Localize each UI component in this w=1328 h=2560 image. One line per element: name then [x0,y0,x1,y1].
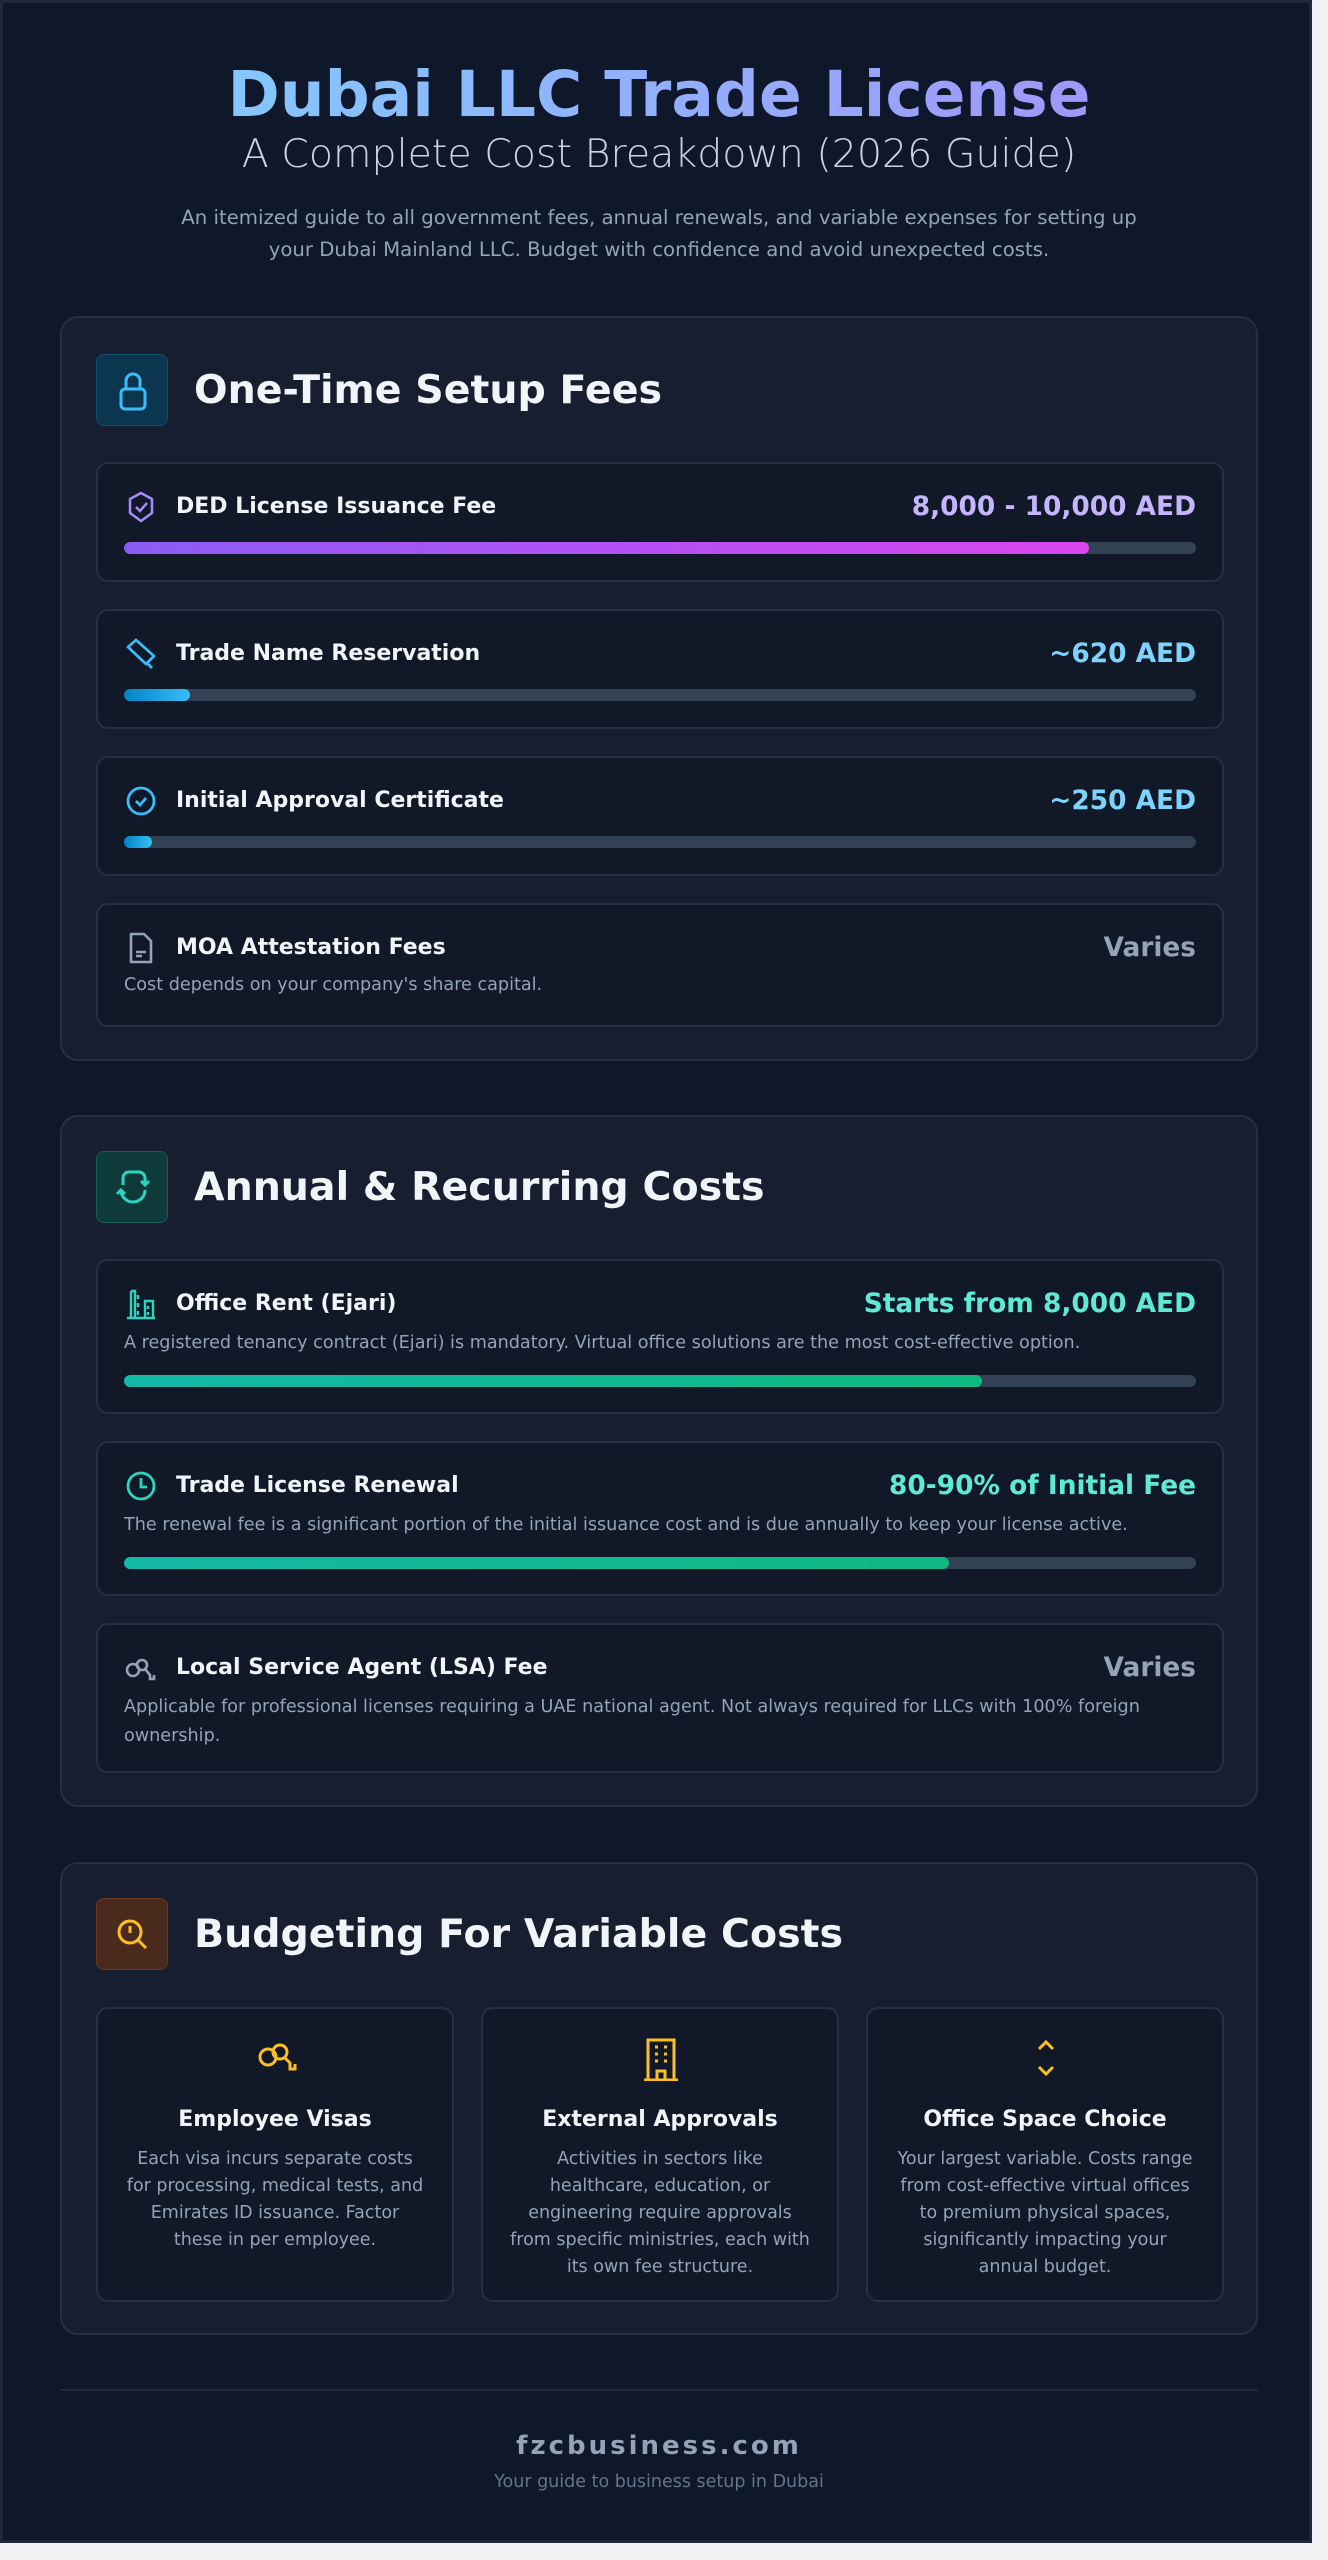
icon: building [644,2038,678,2081]
icon: building [127,1290,155,1320]
value: Starts from 8,000 AED [864,1288,1196,1319]
value: ~250 AED [1049,785,1196,816]
value: 80-90% of Initial Fee [889,1470,1196,1501]
intro text: your Dubai Mainland LLC. Budget with confidence and avoid unexpected costs. [269,238,1049,261]
card: initial approval [96,756,1224,876]
card: office space [866,2007,1224,2302]
footer tagline: Your guide to business setup in Dubai [494,2472,824,2492]
icon: badge check [128,492,154,522]
icon: refresh [96,1151,168,1223]
card: MOA attestation [96,903,1224,1027]
bar [124,836,1196,848]
card: external approvals: External Approvals [542,2107,778,2132]
intro text [181,206,1137,261]
card: DED license [96,462,1224,582]
icon: key [126,1658,156,1680]
icon: chevrons [1038,2040,1054,2076]
icon: document [130,932,152,964]
card: employee visas [96,2007,454,2302]
label: Local Service Agent (LSA) Fee [176,1655,548,1680]
note: Cost depends on your company's share capital. [124,975,542,995]
label: Trade Name Reservation [176,641,480,666]
bar [124,689,1196,701]
heading: Annual & Recurring Costs [194,1164,764,1210]
note: The renewal fee is a significant portion of the initial issuance cost and is due annually to keep your license active. [124,1515,1128,1535]
card: external approvals [481,2007,839,2302]
value: Varies [1104,932,1196,963]
intro text: An itemized guide to all government fees, annual renewals, and variable expenses for setting up [181,206,1137,229]
label: DED License Issuance Fee [176,494,496,519]
value: 8,000 - 10,000 AED [912,491,1196,522]
bar [124,1375,1196,1387]
label: Office Rent (Ejari) [176,1291,396,1316]
card: office space: Office Space Choice [923,2107,1167,2132]
note: Applicable for professional licenses requiring a UAE national agent. Not always required for LLCs with 100% foreign ownership. [124,1697,1140,1746]
panel: variable costs [60,1862,1258,2335]
card: office rent [96,1259,1224,1414]
label: MOA Attestation Fees [176,935,446,960]
card: trade name [96,609,1224,729]
value: Varies [1104,1652,1196,1683]
card: license renewal [96,1441,1224,1596]
bar [124,542,1196,554]
heading: Budgeting For Variable Costs [194,1911,843,1957]
icon: clock [126,1472,156,1500]
title [3,55,1315,135]
icon: tag [126,638,156,669]
panel: annual & recurring [60,1115,1258,1807]
title: Dubai LLC Trade License [227,58,1091,131]
label: Initial Approval Certificate [176,788,504,813]
card: LSA fee [96,1623,1224,1773]
panel: one-time setup fees [60,316,1258,1061]
footer brand: fzcbusiness.com [516,2431,802,2461]
label: Trade License Renewal [176,1473,459,1498]
card: office space: Your largest variable. Costs range from cost-effective virtual offices to premium physical spaces, significantly impacting your annual budget. [897,2149,1192,2277]
heading: One-Time Setup Fees [194,367,662,413]
icon: check circle [126,786,156,816]
bar [124,1557,1196,1569]
card: external approvals: Activities in sectors like healthcare, education, or engineering require approvals from specific ministries, each with its own fee structure. [510,2149,810,2277]
icon: search alert [96,1898,168,1970]
card: employee visas: Each visa incurs separate costs for processing, medical tests, and Emirates ID issuance. Factor these in per employee. [127,2149,423,2250]
card: employee visas: Employee Visas [178,2107,372,2132]
icon: lock [96,354,168,426]
subtitle: A Complete Cost Breakdown (2026 Guide) [242,131,1076,177]
note: A registered tenancy contract (Ejari) is mandatory. Virtual office solutions are the most cost-effective option. [124,1333,1080,1353]
icon: keys [258,2044,296,2070]
value: ~620 AED [1049,638,1196,669]
